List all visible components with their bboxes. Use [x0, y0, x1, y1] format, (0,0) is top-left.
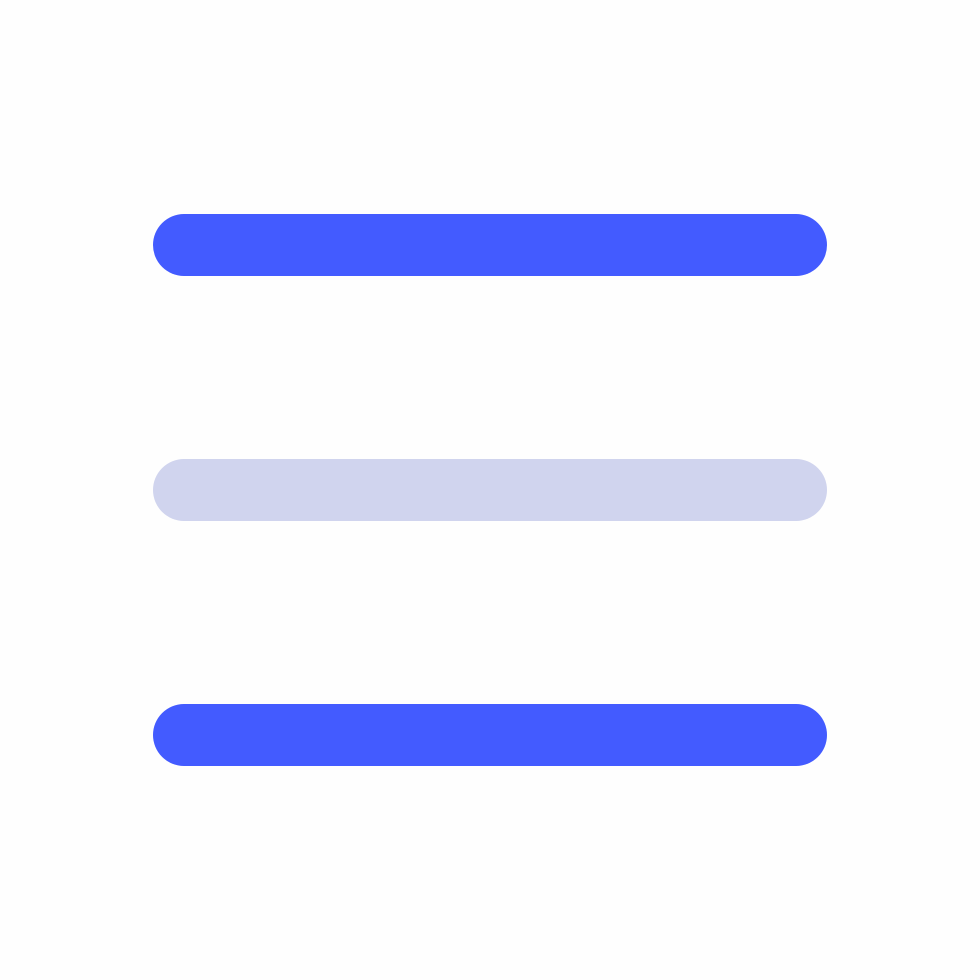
- bottom bar: [153, 704, 827, 766]
- top bar: [153, 214, 827, 276]
- middle bar: [153, 459, 827, 521]
